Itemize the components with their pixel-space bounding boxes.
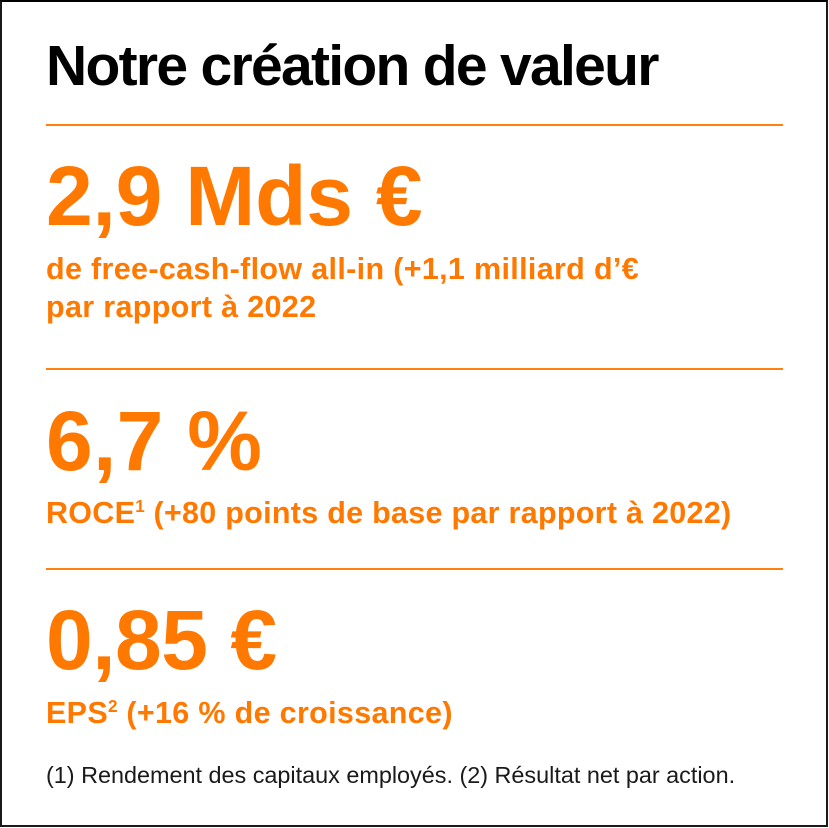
footnote: (1) Rendement des capitaux employés. (2) Résultat net par action. [46, 762, 735, 788]
panel: ROCE [46, 394, 731, 530]
big number: 2,9 Mds €: 2,9 Mds € [46, 149, 422, 243]
title: Notre création de valeur [46, 34, 658, 98]
big number: 0,85 €: 0,85 € [46, 593, 277, 687]
panel: EPS [46, 593, 453, 730]
description: EPS: EPS2 (+16 % de croissance) [46, 696, 453, 730]
description: free cash flow: par rapport à 2022 [46, 290, 316, 324]
description: free cash flow [46, 252, 639, 324]
description: free cash flow: de free-cash-flow all-in (+1,1 milliard d’€ [46, 252, 639, 286]
big number: 6,7 %: 6,7 % [46, 394, 262, 488]
panel: free cash flow [46, 149, 639, 324]
description: ROCE: ROCE1 (+80 points de base par rapport à 2022) [46, 496, 731, 530]
